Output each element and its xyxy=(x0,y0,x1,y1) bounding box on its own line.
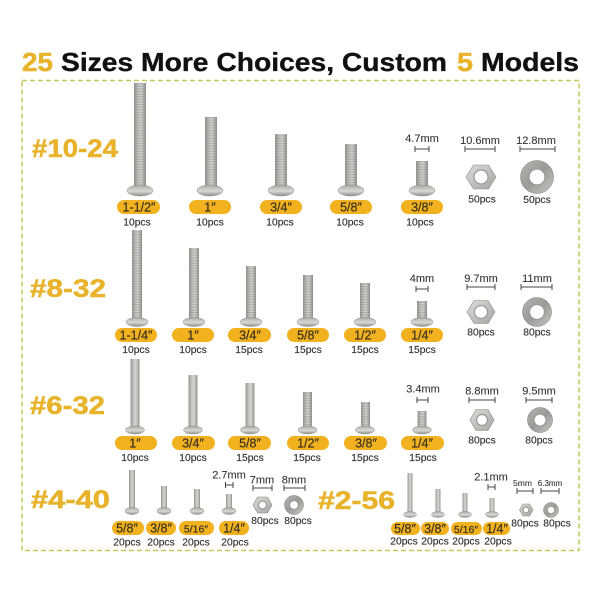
screw 5/8 xyxy=(390,473,420,548)
dimension 3.4mm xyxy=(406,384,440,403)
screw 5/8 xyxy=(228,383,271,464)
dimension 2.7mm xyxy=(212,470,246,488)
heading: #6-32: #6-32 xyxy=(30,392,105,420)
dimension 8mm: 8mm xyxy=(282,474,306,486)
screw 3/8: 10pcs xyxy=(406,218,434,228)
screw 3/4: 15pcs xyxy=(235,345,263,356)
screw 1 inch: 1″ xyxy=(187,328,199,342)
dimension 4mm xyxy=(410,273,434,292)
title xyxy=(22,47,579,77)
screw 1/2 xyxy=(287,392,329,464)
dimension 7mm: 7mm xyxy=(250,474,274,486)
washer: 80pcs xyxy=(525,436,553,446)
heading: #8-32: #8-32 xyxy=(30,275,106,303)
dimension 4mm: 4mm xyxy=(410,273,434,285)
row: #6-32 parts xyxy=(115,359,556,464)
title: 5 xyxy=(457,47,473,77)
screw 1-1/4 xyxy=(115,230,157,356)
dimension 3.4mm: 3.4mm xyxy=(406,384,440,396)
screw 1/4: 15pcs xyxy=(408,345,436,356)
screw 1/4: 15pcs xyxy=(409,453,437,464)
hex nut: 80pcs xyxy=(468,436,496,446)
hex nut xyxy=(467,300,495,338)
screw 1/2: 1/2″ xyxy=(354,328,376,342)
heading: #4-40: #4-40 xyxy=(31,486,110,514)
dimension 9.5mm: 9.5mm xyxy=(522,386,556,398)
screw 3/8: 20pcs xyxy=(147,538,175,548)
hex nut xyxy=(511,504,539,530)
washer xyxy=(522,298,552,338)
screw 5/8: 5/8″ xyxy=(239,436,261,450)
screw 1/4: 20pcs xyxy=(484,536,512,548)
washer: 80pcs xyxy=(284,516,312,527)
screw 5/16 xyxy=(179,489,214,548)
screw 3/8: 3/8″ xyxy=(150,522,172,536)
screw 3/8: 15pcs xyxy=(351,453,379,464)
screw 5/16: 5/16″ xyxy=(184,524,208,536)
screw 1/4 xyxy=(401,411,444,464)
hex nut xyxy=(466,165,496,206)
screw 3/8 xyxy=(421,489,449,548)
row: #10-24 parts xyxy=(117,83,556,228)
dimension 5mm xyxy=(513,478,533,494)
screw 3/8: 3/8″ xyxy=(411,200,433,214)
screw 3/4: 3/4″ xyxy=(182,436,204,450)
row: #2-56 parts xyxy=(390,472,571,548)
screw 1/4 xyxy=(219,494,249,548)
washer xyxy=(520,160,554,206)
screw 1/2: 1/2″ xyxy=(297,436,319,450)
screw 1/4: 1/4″ xyxy=(486,522,508,536)
screw 5/16 xyxy=(451,493,482,548)
screw 1/4: 20pcs xyxy=(221,538,249,548)
hex nut xyxy=(468,410,496,446)
screw 5/8: 5/8″ xyxy=(340,200,362,214)
screw 3/4 xyxy=(172,375,215,464)
hex nut: 80pcs xyxy=(511,518,539,530)
heading: #2-56: #2-56 xyxy=(318,487,395,515)
screw 5/8: 15pcs xyxy=(236,453,264,464)
screw 3/8 xyxy=(146,486,176,548)
hex nut xyxy=(251,497,279,527)
hex nut: 50pcs xyxy=(468,194,496,206)
screw 1/2: 15pcs xyxy=(293,453,321,464)
dimension 9.5mm xyxy=(522,386,556,403)
screw 5/8: 20pcs xyxy=(390,536,418,548)
screw 3/4: 3/4″ xyxy=(270,200,292,214)
screw 5/8: 10pcs xyxy=(336,218,364,228)
dimension 11mm xyxy=(521,273,552,290)
screw 1/4 xyxy=(401,301,443,356)
screw 3/8 xyxy=(401,161,443,228)
screw 1/4 xyxy=(483,498,512,548)
washer: 80pcs xyxy=(543,518,571,530)
screw 3/4: 10pcs xyxy=(266,218,294,228)
screw 3/8: 3/8″ xyxy=(424,522,446,536)
screw 5/8: 5/8″ xyxy=(297,328,319,342)
screw 1-1/2 xyxy=(117,83,160,228)
screw 1/4: 1/4″ xyxy=(223,522,245,536)
dimension 4.7mm xyxy=(405,133,439,152)
dimension 2.1mm xyxy=(474,472,508,490)
title: Models xyxy=(481,47,579,77)
washer: 80pcs xyxy=(523,328,551,338)
screw 1/4: 1/4″ xyxy=(411,328,433,342)
washer xyxy=(284,496,312,527)
row: #4-40 parts xyxy=(112,470,312,548)
screw 1 inch: 1″ xyxy=(129,436,141,450)
title: 25 xyxy=(22,47,53,77)
screw 3/4 xyxy=(228,266,271,356)
row: #8-32 parts xyxy=(115,230,552,356)
hex nut: 80pcs xyxy=(251,516,279,527)
screw 5/8: 20pcs xyxy=(113,538,141,548)
screw 5/8 xyxy=(112,470,144,548)
screw 5/16: 20pcs xyxy=(452,536,480,548)
screw 5/8: 5/8″ xyxy=(116,522,138,536)
screw 3/4: 10pcs xyxy=(179,453,207,464)
screw 5/16: 5/16″ xyxy=(454,524,478,536)
dimension 9.7mm: 9.7mm xyxy=(464,273,498,285)
screw 1 inch xyxy=(189,117,231,228)
dimension 12.8mm: 12.8mm xyxy=(516,135,556,147)
screw 5/8 xyxy=(330,144,372,228)
dimension 10.6mm: 10.6mm xyxy=(460,135,500,147)
hex nut: 80pcs xyxy=(467,328,495,338)
dimension 6.3mm: 6.3mm xyxy=(538,479,563,488)
screw 1/4: 1/4″ xyxy=(411,436,433,450)
washer xyxy=(525,408,553,446)
dimension 5mm: 5mm xyxy=(513,478,532,488)
screw 1-1/4: 10pcs xyxy=(122,345,150,356)
screw 1 inch xyxy=(115,359,157,464)
screw 5/8: 15pcs xyxy=(294,345,322,356)
screw 1 inch xyxy=(172,248,214,356)
screw 5/8 xyxy=(287,275,329,356)
screw 1 inch: 10pcs xyxy=(196,218,224,228)
screw 1 inch: 1″ xyxy=(204,200,216,214)
washer: 50pcs xyxy=(523,195,551,206)
screw 3/4 xyxy=(260,134,302,228)
dashed border panel xyxy=(22,80,579,550)
screw 3/4: 3/4″ xyxy=(239,328,261,342)
title: Sizes More Choices, Custom xyxy=(61,47,447,77)
heading: #10-24: #10-24 xyxy=(32,135,118,163)
screw 1 inch: 10pcs xyxy=(179,345,207,356)
dimension 2.7mm: 2.7mm xyxy=(212,470,246,482)
screw 3/8: 3/8″ xyxy=(355,436,377,450)
screw 5/16: 20pcs xyxy=(182,538,210,548)
dimension 8.8mm: 8.8mm xyxy=(465,386,499,398)
screw 1-1/2: 1-1/2″ xyxy=(123,200,156,214)
screw 1-1/4: 1-1/4″ xyxy=(120,328,153,342)
screw 1-1/2: 10pcs xyxy=(123,218,151,228)
dimension 2.1mm: 2.1mm xyxy=(474,472,508,484)
screw 3/8 xyxy=(344,402,387,464)
screw 1/2: 15pcs xyxy=(351,345,379,356)
screw 1/2 xyxy=(344,283,386,356)
washer xyxy=(543,502,571,530)
dimension 4.7mm: 4.7mm xyxy=(405,133,439,145)
screw 1 inch: 10pcs xyxy=(121,453,149,464)
dimension 6.3mm xyxy=(538,479,563,494)
dimension 11mm: 11mm xyxy=(522,273,552,285)
dimension 8.8mm xyxy=(465,386,499,403)
screw 3/8: 20pcs xyxy=(421,536,449,548)
screw 5/8: 5/8″ xyxy=(394,522,416,536)
